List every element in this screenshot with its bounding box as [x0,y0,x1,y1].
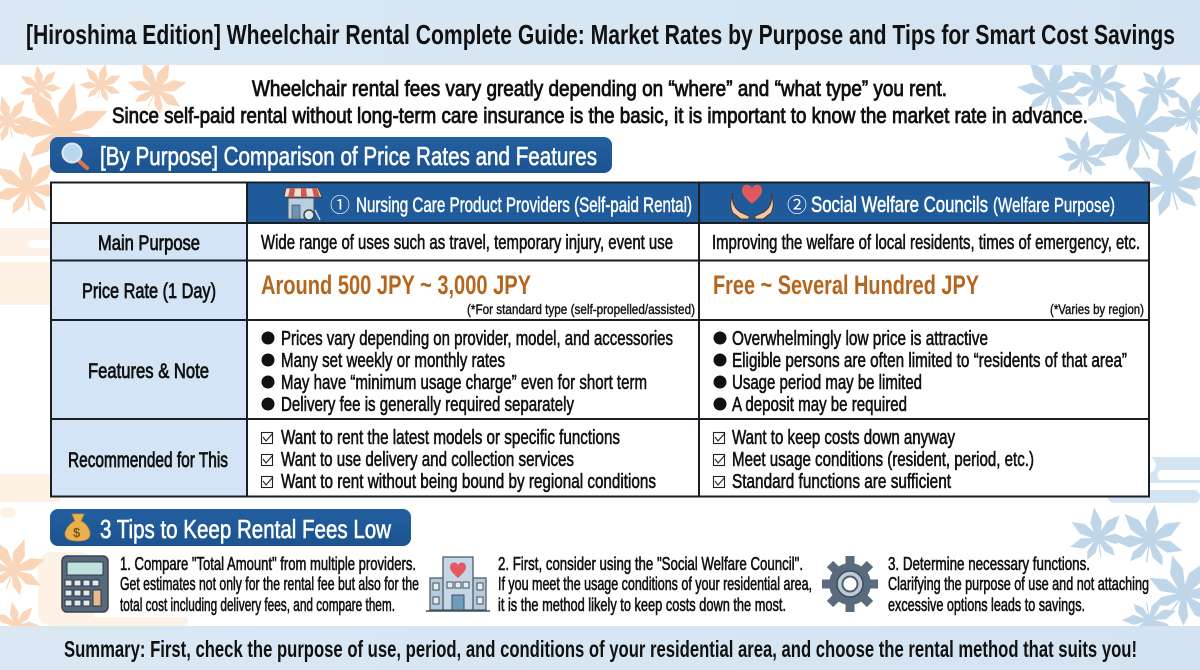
tip 3: determine necessary functions: excessive options leads to savings. [888,595,1085,615]
tip 1: compare total amount: 1. Compare "Total Amount" from multiple providers. [120,554,416,574]
tip 2: social welfare council: If you meet the usage conditions of your residential area, [498,574,812,594]
section heading: comparison [50,137,612,173]
icon: calculator [62,556,108,612]
row: price rate values: Free ~ Several Hundred JPY [713,270,979,300]
row: features list, councils: A deposit may be required [732,394,907,416]
background: orange maple leaves and clouds [0,49,196,645]
row: main purpose values: Wide range of uses such as travel, temporary injury, event use [261,232,673,254]
row: price rate values: Around 500 JPY ~ 3,000 JPY [261,270,531,300]
row: features list, providers: Delivery fee is generally required separately [281,394,574,416]
background: blue maple leaves and clouds [1012,46,1200,654]
section heading: tips [50,509,411,546]
table backgrounds [50,182,1150,497]
row: features list, providers: Many set weekly or monthly rates [281,350,505,372]
row: main purpose values [261,232,1140,254]
row: recommended list, councils: Want to keep costs down anyway [732,427,955,449]
introduction text [112,76,1088,128]
row label: recommended: Recommended for This [68,449,228,472]
icon: shop with wheelchair [284,188,322,220]
column header: social welfare councils [731,185,1115,219]
row: price rate values: (*For standard type (self-propelled/assisted) [467,301,695,317]
row: price rate values [261,270,1144,317]
icon: money bag [65,514,90,541]
row: features list, providers [262,328,673,416]
row: recommended list, providers: Want to rent without being bound by regional conditions [281,471,656,493]
row label: main purpose: Main Purpose [98,232,200,255]
tip 1: compare total amount: total cost including delivery fees, and compare them. [120,595,395,615]
row: recommended list, providers: Want to rent the latest models or specific functions [281,427,620,449]
column header: social welfare councils: (Welfare Purpose) [993,195,1115,217]
section heading: comparison: [By Purpose] Comparison of Price Rates and Features [100,141,597,171]
comparison table [50,182,1150,497]
row label: price rate: Price Rate (1 Day) [82,280,216,303]
tip 3: determine necessary functions [822,554,1149,615]
icon: magnifying glass [62,144,87,168]
column header: nursing care providers [284,188,692,220]
icon: money bag: $ [73,525,81,540]
header band with title [0,0,1200,65]
tip 2: social welfare council: it is the method likely to keep costs down the most. [498,595,786,615]
section heading: tips: 3 Tips to Keep Rental Fees Low [100,514,391,544]
column header: social welfare councils: Social Welfare Councils [811,192,988,217]
row: features list, providers: May have “minimum usage charge” even for short term [281,372,647,394]
row: recommended list, councils [714,427,1034,493]
column header: social welfare councils: ② [787,194,807,217]
icon: hands holding heart [731,185,773,219]
introduction text: Wheelchair rental fees vary greatly depending on “where” and “what type” you rent. [252,76,947,101]
row label: features and note: Features & Note [88,360,209,383]
row: features list, councils [714,328,1127,416]
tip 2: social welfare council [426,554,812,615]
summary band [0,626,1200,670]
row: features list, councils: Usage period may be limited [732,372,922,394]
column header: nursing care providers: ① [330,194,350,217]
tip 2: social welfare council: 2. First, consider using the "Social Welfare Council". [498,554,803,574]
tip 1: compare total amount: Get estimates not only for the rental fee but also for the [120,574,419,594]
tip 1: compare total amount [62,554,419,615]
column header: nursing care providers: Nursing Care Product Providers (Self-paid Rental) [356,194,692,217]
row: recommended list, councils: Standard functions are sufficient [732,471,951,493]
table grid [51,182,1149,497]
row: features list, councils: Overwhelmingly low price is attractive [732,328,988,350]
row: recommended list, councils: Meet usage conditions (resident, period, etc.) [732,449,1034,471]
row: recommended list, providers [262,427,656,493]
icon: gear [822,556,878,612]
tip 3: determine necessary functions: 3. Determine necessary functions. [888,554,1090,574]
row: price rate values: (*Varies by region) [1050,301,1144,317]
icon: building with heart [426,557,490,611]
row: features list, providers: Prices vary depending on provider, model, and accessories [281,328,673,350]
row: recommended list, providers: Want to use delivery and collection services [281,449,574,471]
